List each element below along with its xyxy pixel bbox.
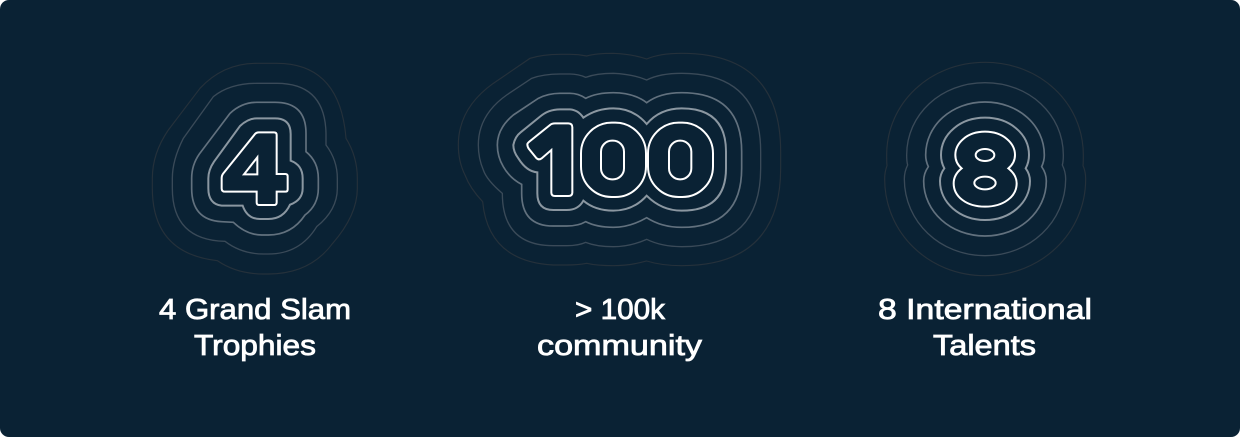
label: 4 Grand Slam Trophies: 4 Grand Slam xyxy=(159,294,351,326)
label: 8 International Talents: 8 International xyxy=(878,294,1092,326)
icon: concentric outlined number 8 xyxy=(885,62,1086,276)
label: 8 International Talents xyxy=(878,294,1092,362)
label: >100k community: community xyxy=(537,330,703,362)
panel: community xyxy=(458,53,781,362)
label: >100k community xyxy=(537,294,703,362)
label: >100k community: > 100k xyxy=(575,294,665,326)
label: 8 International Talents: Talents xyxy=(933,330,1036,362)
panel: international talents xyxy=(878,62,1092,362)
label: 4 Grand Slam Trophies xyxy=(159,294,351,362)
icon: concentric outlined number 4 xyxy=(152,63,357,274)
icon: concentric outlined number 100 xyxy=(458,53,781,266)
label: 4 Grand Slam Trophies: Trophies xyxy=(194,330,316,362)
panel: grand slam trophies xyxy=(152,63,357,362)
